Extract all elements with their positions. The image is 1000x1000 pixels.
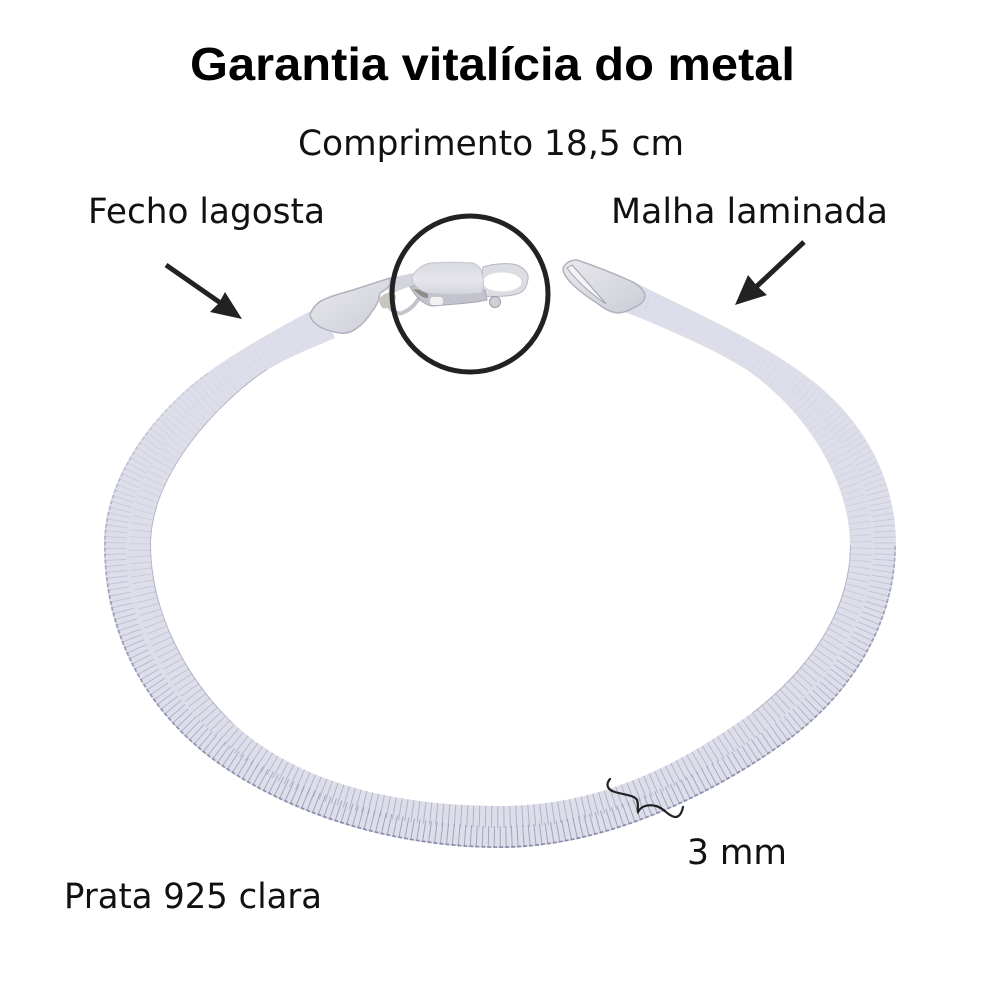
- label: length: Comprimento 18,5 cm: [298, 124, 684, 164]
- arrow: clasp label: [166, 265, 242, 319]
- inner edge shadow: [151, 370, 850, 723]
- inner half scales: [129, 434, 872, 828]
- label: width: 3 mm: [687, 833, 787, 873]
- title: Garantia vitalícia do metal: [190, 38, 795, 90]
- arrow: mesh label: [735, 242, 804, 305]
- label: mesh type: Malha laminada: [611, 192, 888, 232]
- label: material: Prata 925 clara: [64, 877, 322, 917]
- width brace: [608, 779, 683, 817]
- infographic canvas: [67, 46, 896, 908]
- outer half scales: [104, 412, 896, 846]
- outer edge shadow: [104, 373, 896, 848]
- right end cap: [563, 260, 645, 313]
- label: clasp type: Fecho lagosta: [88, 192, 325, 232]
- left end cap with jump ring: [310, 272, 420, 333]
- lobster clasp: [410, 262, 528, 308]
- highlight circle around clasp: [392, 216, 548, 372]
- bracelet band: [104, 280, 896, 848]
